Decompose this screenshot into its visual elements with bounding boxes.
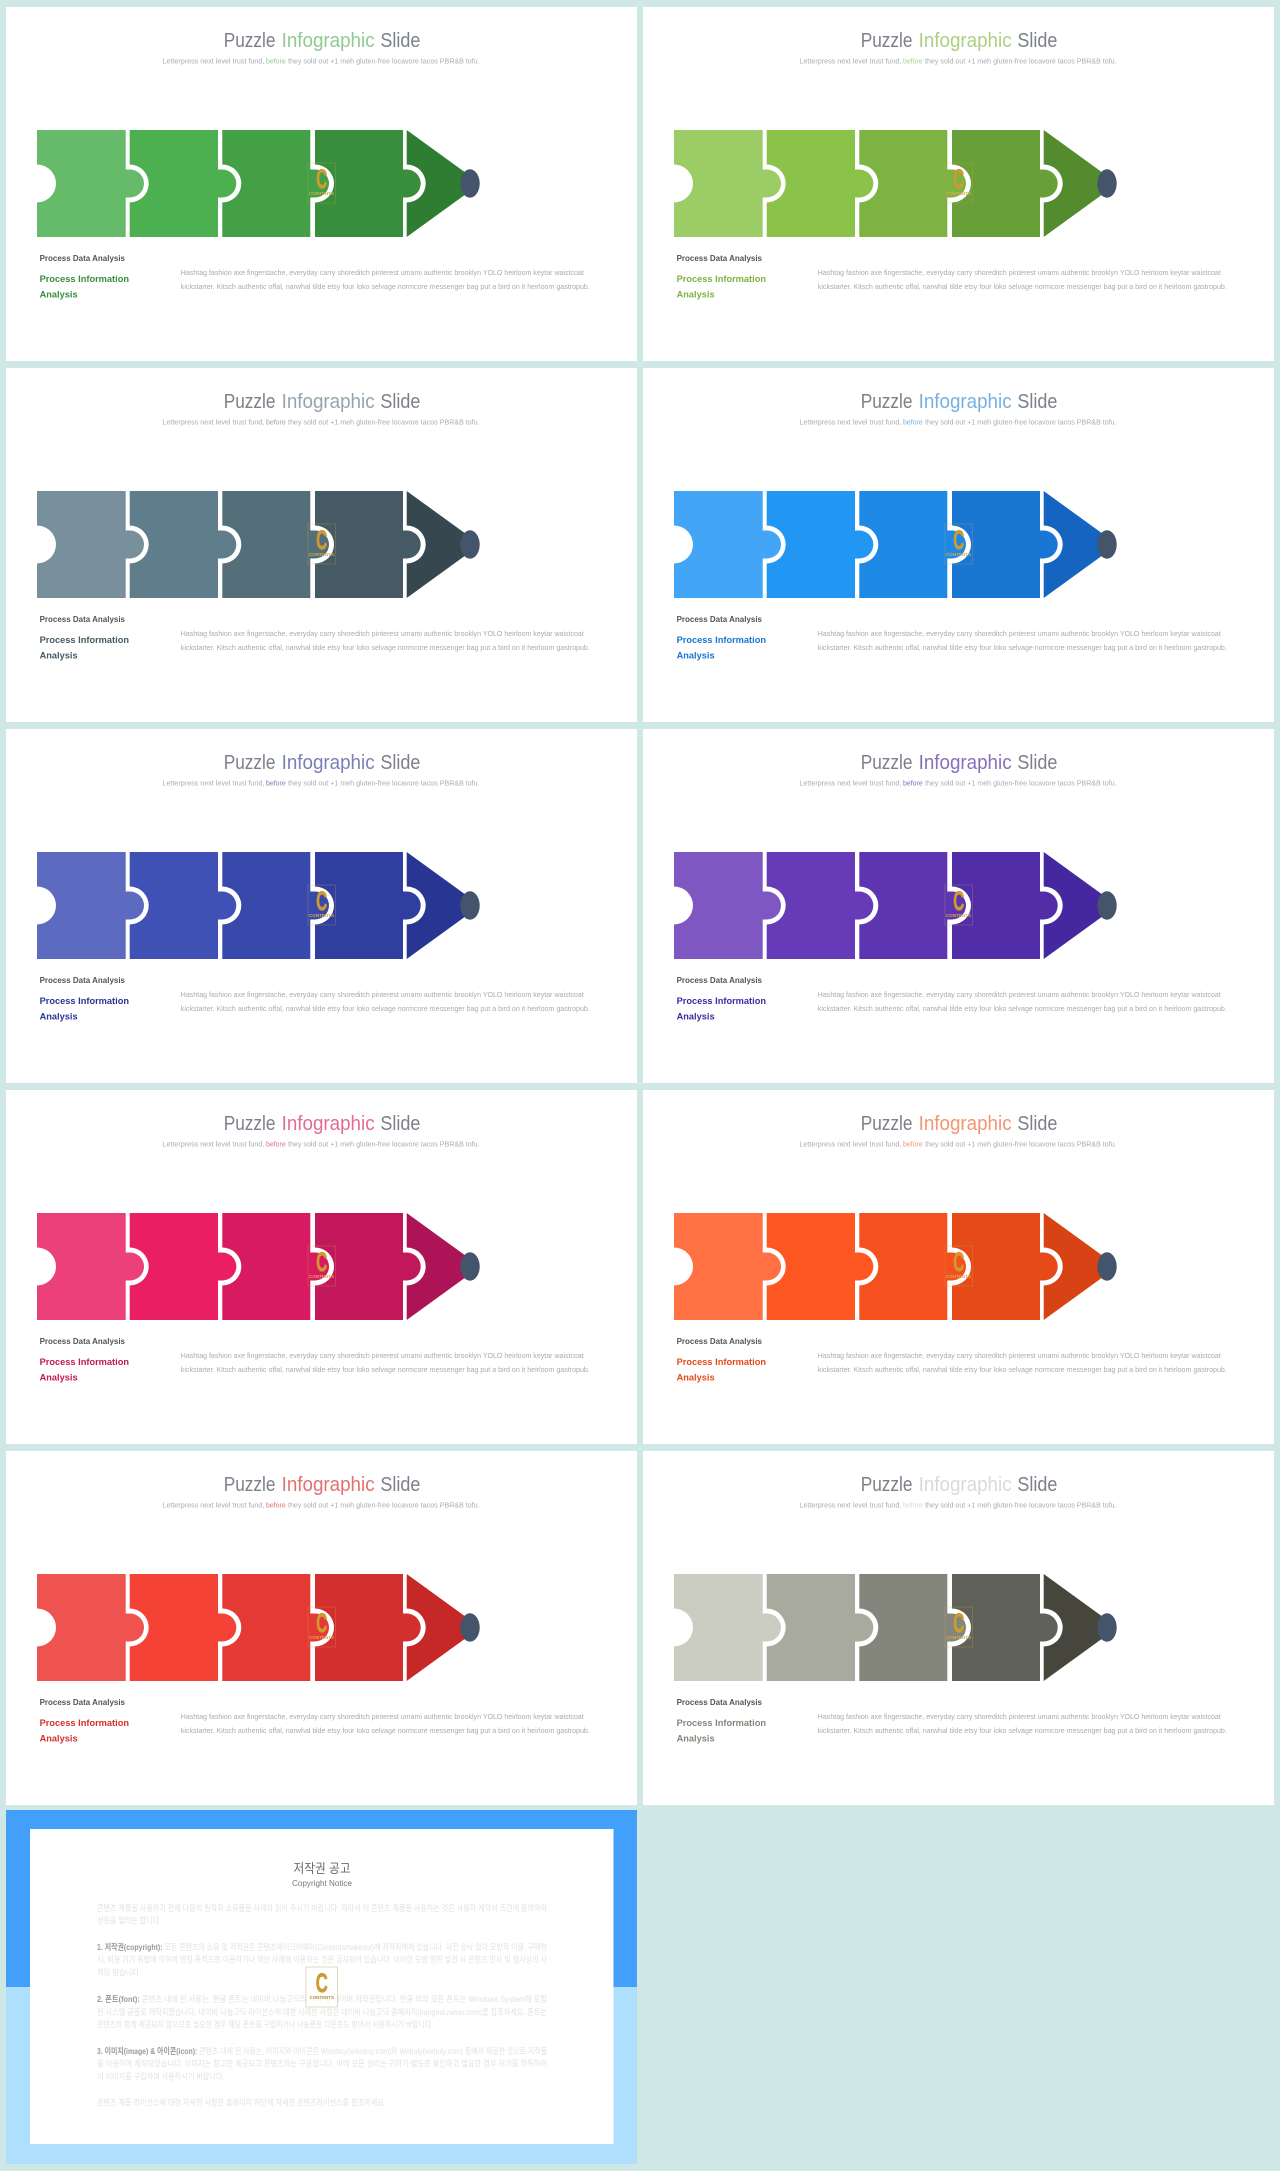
body text: Hashtag fashion axe fingerstache, everyday carry shoreditch pinterest umami authentic brooklyn YOLO heirloom keytar waistcoat xyxy=(181,1712,584,1721)
label: process information: Analysis xyxy=(677,290,715,300)
subtitle: they sold out +1 meh gluten-free locavore tacos PBR&B tofu. xyxy=(288,1502,480,1510)
title: Slide xyxy=(380,390,420,413)
body text xyxy=(181,990,590,1013)
arrow tip piece xyxy=(1044,491,1103,598)
label: process information: Process Information xyxy=(677,635,766,646)
label: process information: Process Information xyxy=(677,274,766,285)
watermark logo: CONTENTS xyxy=(946,1274,971,1279)
section 2: font: 된 시스템 글꼴로 제작되었습니다. 네이버 나눔고딕 라이선스에 대한 사례한 사항은 네이버 나눔고딕 홈페이지(hangeul.naver.com)를 참조하세요. 폰트는 xyxy=(97,2006,547,2017)
subtitle: before xyxy=(903,1502,923,1510)
arrow tip dot xyxy=(460,530,480,559)
watermark logo: CONTENTS xyxy=(946,552,971,557)
title: Puzzle xyxy=(224,29,276,52)
label: process information: Process Information xyxy=(677,1718,766,1729)
body text xyxy=(181,268,590,291)
puzzle piece 1 xyxy=(37,491,144,598)
section 3: image and icon: 이 이미지를 구입하여 사용하시기 바랍니다. xyxy=(97,2070,224,2082)
puzzle piece 1 xyxy=(674,130,781,237)
label: process information: Process Information xyxy=(40,1357,129,1368)
body text: Hashtag fashion axe fingerstache, everyday carry shoreditch pinterest umami authentic brooklyn YOLO heirloom keytar waistcoat xyxy=(181,268,584,277)
watermark logo: C xyxy=(953,886,964,916)
body text: Hashtag fashion axe fingerstache, everyday carry shoreditch pinterest umami authentic brooklyn YOLO heirloom keytar waistcoat xyxy=(818,1351,1221,1360)
title: Infographic xyxy=(282,1473,375,1496)
title: Slide xyxy=(1017,1112,1057,1135)
label: process data analysis: Process Data Analysis xyxy=(40,1698,126,1707)
arrow tip piece xyxy=(407,1213,466,1320)
puzzle arrow chart xyxy=(674,1574,1117,1681)
puzzle piece 3 xyxy=(222,130,329,237)
subtitle: before xyxy=(903,58,923,66)
title: Slide xyxy=(1017,390,1057,413)
panel: purple slide xyxy=(643,729,1274,1083)
copyright intro xyxy=(97,1902,547,1926)
watermark logo: C xyxy=(316,164,327,194)
puzzle piece 2 xyxy=(767,491,873,598)
puzzle piece 4 xyxy=(952,130,1058,237)
arrow tip piece xyxy=(407,130,466,237)
arrow tip dot xyxy=(460,891,480,920)
label: process information xyxy=(40,1718,129,1744)
body text xyxy=(818,990,1227,1013)
label: process data analysis: Process Data Analysis xyxy=(40,976,126,985)
puzzle piece 3 xyxy=(859,130,966,237)
label: process information xyxy=(677,635,766,662)
body text: Hashtag fashion axe fingerstache, everyday carry shoreditch pinterest umami authentic brooklyn YOLO heirloom keytar waistcoat xyxy=(181,1351,584,1360)
title: Infographic xyxy=(282,390,375,413)
puzzle piece 4 xyxy=(952,1574,1058,1681)
copyright heading: 저작권 공고 xyxy=(294,1861,351,1876)
section 3: image and icon: 3. 이미지(image) & 아이콘(icon): 콘텐츠 내에 된 사용는, 이미지와 아이콘은 Wisoboy(wisoboy.com)와 Weboly(weboly.com) 등에서 제공한 것으로 저작물 xyxy=(97,2045,547,2056)
watermark logo xyxy=(308,163,336,203)
subtitle xyxy=(162,780,480,788)
title: Puzzle xyxy=(861,390,912,413)
title: Slide xyxy=(1017,751,1057,774)
watermark logo: CONTENTS xyxy=(946,191,971,196)
title: Puzzle xyxy=(224,1473,276,1496)
section 2: font xyxy=(97,1993,547,2030)
puzzle arrow chart xyxy=(674,491,1117,598)
title xyxy=(224,29,420,52)
label: process information: Process Information xyxy=(40,1718,129,1729)
subtitle: Letterpress next level trust fund, xyxy=(799,780,901,788)
copyright subheading: Copyright Notice xyxy=(292,1878,352,1888)
body text: kickstarter. Kitsch authentic offal, narwhal tilde etsy four loko selvage normcore messenger bag put a bird on it heirloom gastropub. xyxy=(818,1004,1227,1013)
puzzle piece 3 xyxy=(859,491,966,598)
panel: copyright notice xyxy=(6,1810,637,2164)
puzzle piece 1 xyxy=(674,1213,781,1320)
body text: kickstarter. Kitsch authentic offal, narwhal tilde etsy four loko selvage normcore messenger bag put a bird on it heirloom gastropub. xyxy=(818,1365,1227,1374)
subtitle xyxy=(799,1502,1117,1510)
section 1: copyright: 책임 받습니다. xyxy=(97,1966,141,1978)
label: process data analysis: Process Data Analysis xyxy=(40,1337,126,1346)
subtitle: Letterpress next level trust fund, xyxy=(162,1502,264,1510)
watermark logo xyxy=(945,1246,972,1286)
label: process information xyxy=(40,274,129,300)
title: Slide xyxy=(380,1473,420,1496)
puzzle piece 3 xyxy=(222,1213,329,1320)
subtitle: Letterpress next level trust fund, xyxy=(799,1502,901,1510)
watermark logo: C xyxy=(316,525,327,555)
subtitle: they sold out +1 meh gluten-free locavore tacos PBR&B tofu. xyxy=(925,1142,1117,1148)
arrow tip dot xyxy=(460,1613,480,1642)
subtitle xyxy=(162,1502,480,1510)
puzzle piece 1 xyxy=(674,1574,781,1681)
label: process information: Analysis xyxy=(40,1012,78,1022)
title: Infographic xyxy=(282,29,375,52)
subtitle: before xyxy=(266,420,286,426)
arrow tip dot xyxy=(1097,530,1117,559)
watermark logo xyxy=(945,1607,972,1647)
puzzle piece 3 xyxy=(222,852,329,959)
title: Slide xyxy=(380,751,420,774)
puzzle piece 4 xyxy=(952,491,1058,598)
puzzle piece 2 xyxy=(130,130,236,237)
panel: warm grey slide xyxy=(643,1451,1274,1805)
puzzle piece 1 xyxy=(37,130,144,237)
watermark logo: CONTENTS xyxy=(309,191,334,196)
watermark logo: C xyxy=(953,1608,964,1638)
label: process information: Process Information xyxy=(677,1357,766,1368)
puzzle piece 3 xyxy=(859,1213,966,1320)
title: Infographic xyxy=(919,1473,1012,1496)
subtitle: before xyxy=(266,1502,286,1510)
label: process data analysis: Process Data Analysis xyxy=(677,615,763,624)
title xyxy=(861,29,1057,52)
subtitle: Letterpress next level trust fund, xyxy=(799,420,901,426)
puzzle piece 4 xyxy=(315,1213,421,1320)
label: process data analysis: Process Data Analysis xyxy=(677,1698,763,1707)
panel: blue slide xyxy=(643,368,1274,722)
puzzle piece 4 xyxy=(952,852,1058,959)
subtitle xyxy=(162,420,480,426)
title xyxy=(861,390,1057,413)
label: process information: Analysis xyxy=(40,290,78,300)
puzzle piece 2 xyxy=(767,852,873,959)
puzzle piece 4 xyxy=(315,852,421,959)
title: Puzzle xyxy=(861,1112,912,1135)
label: process information: Analysis xyxy=(40,1372,78,1384)
puzzle arrow chart xyxy=(37,130,480,237)
label: process information: Process Information xyxy=(677,996,766,1007)
subtitle: before xyxy=(266,1142,286,1148)
puzzle piece 2 xyxy=(130,1213,236,1320)
subtitle: they sold out +1 meh gluten-free locavore tacos PBR&B tofu. xyxy=(288,780,480,788)
label: process information: Analysis xyxy=(40,650,78,662)
label: process data analysis: Process Data Analysis xyxy=(677,976,763,985)
watermark logo xyxy=(945,163,972,203)
subtitle: they sold out +1 meh gluten-free locavore tacos PBR&B tofu. xyxy=(288,420,480,426)
subtitle: before xyxy=(266,58,286,66)
label: process information: Process Information xyxy=(40,635,129,646)
body text: Hashtag fashion axe fingerstache, everyday carry shoreditch pinterest umami authentic brooklyn YOLO heirloom keytar waistcoat xyxy=(818,990,1221,999)
puzzle piece 4 xyxy=(315,491,421,598)
watermark logo: C xyxy=(316,1247,327,1277)
body text: Hashtag fashion axe fingerstache, everyday carry shoreditch pinterest umami authentic brooklyn YOLO heirloom keytar waistcoat xyxy=(818,629,1221,638)
label: process data analysis: Process Data Analysis xyxy=(40,254,126,263)
subtitle: before xyxy=(903,1142,923,1148)
puzzle piece 1 xyxy=(37,852,144,959)
label: process information xyxy=(677,1718,766,1744)
body text: Hashtag fashion axe fingerstache, everyday carry shoreditch pinterest umami authentic brooklyn YOLO heirloom keytar waistcoat xyxy=(181,990,584,999)
panel: indigo slide xyxy=(6,729,637,1083)
watermark logo: CONTENTS xyxy=(946,1635,971,1640)
panel: orange slide xyxy=(643,1090,1274,1444)
title xyxy=(861,751,1057,774)
watermark logo: CONTENTS xyxy=(309,913,334,918)
puzzle piece 4 xyxy=(315,130,421,237)
puzzle arrow chart xyxy=(37,1574,480,1681)
arrow tip piece xyxy=(407,852,466,959)
watermark logo: C xyxy=(953,1247,964,1277)
label: process information: Analysis xyxy=(40,1734,78,1744)
puzzle piece 4 xyxy=(952,1213,1058,1320)
subtitle: they sold out +1 meh gluten-free locavore tacos PBR&B tofu. xyxy=(288,1142,480,1148)
title: Infographic xyxy=(919,751,1012,774)
arrow tip dot xyxy=(460,1252,480,1281)
label: process information: Process Information xyxy=(40,996,129,1007)
watermark logo xyxy=(945,885,972,925)
copyright intro: 성원을 알리는 합니다. xyxy=(97,1916,161,1926)
panel: light green slide xyxy=(643,7,1274,361)
title xyxy=(224,751,420,774)
subtitle: Letterpress next level trust fund, xyxy=(799,58,901,66)
arrow tip piece xyxy=(407,1574,466,1681)
puzzle piece 2 xyxy=(767,1213,873,1320)
subtitle xyxy=(799,780,1117,788)
title: Infographic xyxy=(282,1112,375,1135)
subtitle xyxy=(799,58,1117,66)
puzzle piece 4 xyxy=(315,1574,421,1681)
puzzle piece 3 xyxy=(859,852,966,959)
body text: kickstarter. Kitsch authentic offal, narwhal tilde etsy four loko selvage normcore messenger bag put a bird on it heirloom gastropub. xyxy=(818,282,1227,291)
section 1: copyright: 시, 비용 기기 위법에 의하여 명칭 목적으로 이용하거나 제안 사례에 이용하는 것은 금지되어 있습니다. 이러한 모방 행위 발견 시 콘텐츠 민사 및 형사상의 사 xyxy=(97,1954,547,1964)
title: Slide xyxy=(380,29,420,52)
title: Slide xyxy=(1017,29,1057,52)
label: process information xyxy=(40,1357,129,1384)
subtitle: they sold out +1 meh gluten-free locavore tacos PBR&B tofu. xyxy=(925,420,1117,426)
subtitle: they sold out +1 meh gluten-free locavore tacos PBR&B tofu. xyxy=(288,58,480,66)
copyright intro: 콘텐츠 제품을 사용하기 전에 다음의 원작자 소유물을 사례와 읽어 주시기 바랍니다. 따라서 이 콘텐츠 제품을 사용하는 것은 사용자 계약서 조건에 동의하여 xyxy=(97,1902,547,1913)
puzzle arrow chart xyxy=(674,852,1117,959)
puzzle piece 2 xyxy=(130,491,236,598)
puzzle piece 1 xyxy=(37,1213,144,1320)
subtitle: before xyxy=(903,420,923,426)
puzzle piece 3 xyxy=(859,1574,966,1681)
subtitle: before xyxy=(903,780,923,788)
subtitle: Letterpress next level trust fund, xyxy=(162,420,264,426)
panel: green slide xyxy=(6,7,637,361)
body text: kickstarter. Kitsch authentic offal, narwhal tilde etsy four loko selvage normcore messenger bag put a bird on it heirloom gastropub. xyxy=(181,643,590,652)
arrow tip piece xyxy=(1044,1213,1103,1320)
body text xyxy=(818,1712,1227,1735)
title: Puzzle xyxy=(861,29,912,52)
puzzle piece 3 xyxy=(222,1574,329,1681)
label: process data analysis: Process Data Analysis xyxy=(677,1337,763,1346)
title: Puzzle xyxy=(224,1112,276,1135)
subtitle: Letterpress next level trust fund, xyxy=(162,58,264,66)
puzzle arrow chart xyxy=(37,1213,480,1320)
subtitle: Letterpress next level trust fund, xyxy=(162,780,264,788)
watermark logo: C xyxy=(953,525,964,555)
label: process information xyxy=(677,1357,766,1384)
arrow tip piece xyxy=(407,491,466,598)
watermark logo xyxy=(308,885,336,925)
panel: red slide xyxy=(6,1451,637,1805)
label: process information: Analysis xyxy=(677,1734,715,1744)
title: Puzzle xyxy=(224,390,276,413)
title: Infographic xyxy=(919,1112,1012,1135)
section 3: image and icon xyxy=(97,2045,547,2082)
body text: kickstarter. Kitsch authentic offal, narwhal tilde etsy four loko selvage normcore messenger bag put a bird on it heirloom gastropub. xyxy=(181,1004,590,1013)
title xyxy=(861,1473,1057,1496)
title: Infographic xyxy=(282,751,375,774)
body text xyxy=(818,268,1227,291)
label: process information: Analysis xyxy=(677,1372,715,1384)
arrow tip dot xyxy=(1097,169,1117,198)
body text: kickstarter. Kitsch authentic offal, narwhal tilde etsy four loko selvage normcore messenger bag put a bird on it heirloom gastropub. xyxy=(818,643,1227,652)
label: process information xyxy=(677,274,766,300)
subtitle: Letterpress next level trust fund, xyxy=(799,1142,901,1148)
arrow tip dot xyxy=(1097,891,1117,920)
watermark logo: C xyxy=(316,886,327,916)
watermark logo: CONTENTS xyxy=(946,913,971,918)
arrow tip dot xyxy=(460,169,480,198)
arrow tip piece xyxy=(1044,130,1103,237)
title: Slide xyxy=(1017,1473,1057,1496)
body text: kickstarter. Kitsch authentic offal, narwhal tilde etsy four loko selvage normcore messenger bag put a bird on it heirloom gastropub. xyxy=(181,1726,590,1735)
body text xyxy=(818,1351,1227,1374)
section 2: font: 2. 폰트(font): 콘텐츠 내에 된 사용는, 한글 폰트는 네이버 나눔고딕의 서체 및 네이버 저작권입니다. 한글 외의 모든 폰트는 Windows System에 포함 xyxy=(97,1993,547,2004)
puzzle piece 2 xyxy=(130,852,236,959)
title xyxy=(224,1112,420,1135)
body text xyxy=(181,629,590,652)
label: process information xyxy=(677,996,766,1022)
puzzle piece 1 xyxy=(37,1574,144,1681)
arrow tip piece xyxy=(1044,1574,1103,1681)
subtitle: they sold out +1 meh gluten-free locavore tacos PBR&B tofu. xyxy=(925,58,1117,66)
label: process information: Analysis xyxy=(677,1012,715,1022)
section 3: image and icon: 을 이용하여 제작되었습니다. 이미지는 참고만 제공되고 콘텐츠와는 구분합니다. 이에 모든 권리는 귀하가 별도로 확인하고 필요한 경우 허가를 취득하여 xyxy=(97,2058,547,2068)
puzzle piece 1 xyxy=(674,852,781,959)
arrow tip piece xyxy=(1044,852,1103,959)
watermark logo xyxy=(308,524,336,564)
section 2: font: 콘텐츠의 함께 제공되지 않으므로 필요한 경우 해당 폰트를 구입하거나 나눔폰트 다운로드 받아서 사용하시기 바랍니다. xyxy=(97,2018,433,2030)
panel: pink slide xyxy=(6,1090,637,1444)
title: Infographic xyxy=(919,390,1012,413)
title: Puzzle xyxy=(861,1473,912,1496)
title: Slide xyxy=(380,1112,420,1135)
title xyxy=(861,1112,1057,1135)
body text: kickstarter. Kitsch authentic offal, narwhal tilde etsy four loko selvage normcore messenger bag put a bird on it heirloom gastropub. xyxy=(181,282,590,291)
label: process information xyxy=(40,996,129,1022)
body text: kickstarter. Kitsch authentic offal, narwhal tilde etsy four loko selvage normcore messenger bag put a bird on it heirloom gastropub. xyxy=(181,1365,590,1374)
label: process data analysis: Process Data Analysis xyxy=(677,254,763,263)
watermark logo: C xyxy=(316,1608,327,1638)
subtitle: before xyxy=(266,780,286,788)
title: Infographic xyxy=(919,29,1012,52)
body text xyxy=(818,629,1227,652)
watermark logo xyxy=(308,1246,336,1286)
watermark logo: C xyxy=(953,164,964,194)
subtitle: they sold out +1 meh gluten-free locavore tacos PBR&B tofu. xyxy=(925,1502,1117,1510)
body text: Hashtag fashion axe fingerstache, everyday carry shoreditch pinterest umami authentic brooklyn YOLO heirloom keytar waistcoat xyxy=(818,1712,1221,1721)
section 1: copyright xyxy=(97,1941,547,1978)
watermark logo xyxy=(308,1607,336,1647)
watermark logo: CONTENTS xyxy=(309,1635,334,1640)
watermark logo: C xyxy=(316,1968,328,1998)
puzzle piece 2 xyxy=(767,130,873,237)
watermark logo: CONTENTS xyxy=(310,1995,334,2000)
body text: Hashtag fashion axe fingerstache, everyday carry shoreditch pinterest umami authentic brooklyn YOLO heirloom keytar waistcoat xyxy=(818,268,1221,277)
panel: blue grey slide xyxy=(6,368,637,722)
closing note: 콘텐츠 제품 라이선스에 대한 자세한 사항은 홈페이지 하단에 자세한 콘텐츠라이선스를 참조하세요. xyxy=(97,2096,386,2108)
puzzle arrow chart xyxy=(37,852,480,959)
puzzle arrow chart xyxy=(674,1213,1117,1320)
body text: kickstarter. Kitsch authentic offal, narwhal tilde etsy four loko selvage normcore messenger bag put a bird on it heirloom gastropub. xyxy=(818,1726,1227,1735)
label: process information: Process Information xyxy=(40,274,129,285)
puzzle piece 2 xyxy=(130,1574,236,1681)
arrow tip dot xyxy=(1097,1252,1117,1281)
label: process information xyxy=(40,635,129,662)
section 1: copyright: 1. 저작권(copyright): 모든 콘텐츠의 소유 및 저작권은 콘텐츠메이크어웨이(Contentsmakeout)에 저작자에게 있습니다. 사전 승낙 없이 모방적 이용, 구매한 xyxy=(97,1941,547,1952)
arrow tip dot xyxy=(1097,1613,1117,1642)
subtitle xyxy=(162,58,480,66)
watermark logo xyxy=(945,524,972,564)
title xyxy=(224,1473,420,1496)
subtitle xyxy=(799,1142,1117,1148)
label: process data analysis: Process Data Analysis xyxy=(40,615,126,624)
subtitle xyxy=(799,420,1117,426)
body text: Hashtag fashion axe fingerstache, everyday carry shoreditch pinterest umami authentic brooklyn YOLO heirloom keytar waistcoat xyxy=(181,629,584,638)
puzzle arrow chart xyxy=(674,130,1117,237)
subtitle: they sold out +1 meh gluten-free locavore tacos PBR&B tofu. xyxy=(925,780,1117,788)
title: Puzzle xyxy=(224,751,276,774)
subtitle: Letterpress next level trust fund, xyxy=(162,1142,264,1148)
puzzle piece 3 xyxy=(222,491,329,598)
title: Puzzle xyxy=(861,751,912,774)
title xyxy=(224,390,420,413)
label: process information: Analysis xyxy=(677,650,715,662)
watermark logo: CONTENTS xyxy=(309,1274,334,1279)
watermark logo: CONTENTS xyxy=(309,552,334,557)
subtitle xyxy=(162,1142,480,1148)
puzzle piece 2 xyxy=(767,1574,873,1681)
body text xyxy=(181,1712,590,1735)
watermark logo xyxy=(306,1967,338,2007)
puzzle piece 1 xyxy=(674,491,781,598)
puzzle arrow chart xyxy=(37,491,480,598)
body text xyxy=(181,1351,590,1374)
